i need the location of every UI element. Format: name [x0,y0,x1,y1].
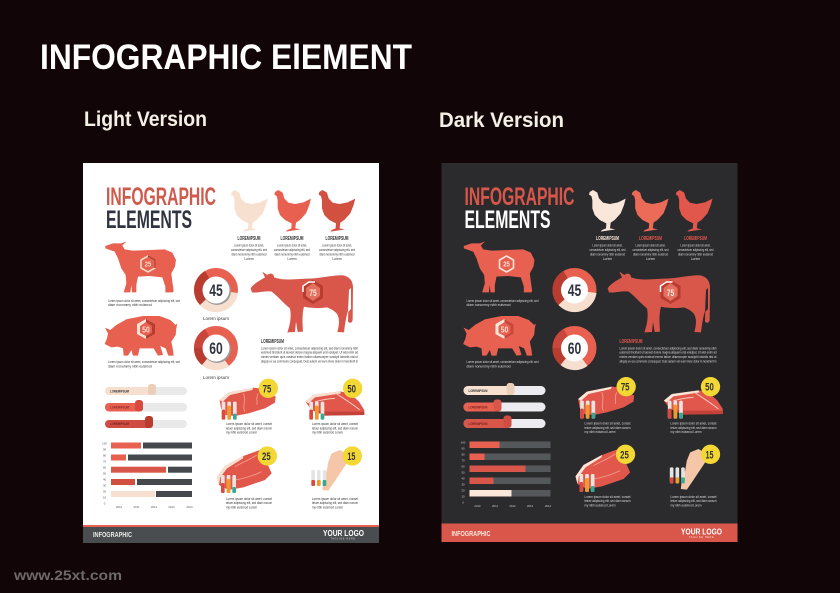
pig caption: Lorem ipsum dolor sit amet, consectetuer adipiscing elit, sed [466,360,539,364]
watermark: www.25xt.com [13,567,122,583]
slider 2 [105,400,187,412]
pig with badge: 50 [501,326,509,334]
bar chart: 80 [103,454,106,458]
hen caption 3 [678,236,714,261]
hen caption 1: Lorem ipsum dolor sit amet, [592,244,623,248]
pig caption: diam nonummy nibh euismod [108,364,152,368]
steak captions: tetuer adipiscing elit, sed diam nonum [226,426,272,430]
steak captions: my nibh euismod Lorem [584,430,616,434]
hen caption 1: Lorem ipsum dolor sit amet, [234,244,264,248]
steak captions: my nibh euismod Lorem [670,430,702,434]
hen caption 2: diam nonummy nibh euismod [274,252,310,256]
bar chart: 70 [461,458,465,462]
slider 1: LOREMIPSUM [110,390,129,394]
steak 50 [305,379,364,420]
cow caption: aliquip ex ea commodo consequat. Duis autem vel eum iriure dolor in hendrerit in [261,360,358,364]
cow caption: Lorem ipsum dolor sit amet, consectetuer adipiscing elit, sed diam nonummy nibh [261,346,358,350]
hen caption 2: consectetuer adipiscing elit, sed [274,248,310,252]
donut 60 [194,329,234,370]
poster title: ELEMENTS [106,206,192,234]
donut 45 [194,271,238,312]
slider 1 [464,383,546,395]
hen caption 2: consectetuer adipiscing elit, sed [632,248,669,252]
bar chart: 40 [461,476,465,480]
sheep caption: Lorem ipsum dolor sit amet, consectetuer adipiscing elit, sed [108,299,180,303]
bar chart: 0 [104,502,106,506]
heading: dark version: Dark Version [439,109,564,132]
steak captions: my nibh euismod Lorem [312,430,343,434]
bar chart: 90 [461,446,465,450]
steak 50: 50 [705,382,714,394]
main heading: INFOGRAPHIC ElEMENT [40,38,412,77]
sheep with badge: 25 [145,262,151,268]
bar chart: 2012 [151,505,158,509]
donut 60: 60 [209,339,223,358]
steak captions: Lorem ipsum dolor sit amet, conset [670,495,717,499]
bar chart: 30 [461,482,465,486]
steak 25: 25 [262,451,271,463]
hen caption 3: LOREMIPSUM [326,236,348,242]
cow caption [261,339,358,364]
steak 25 [575,445,635,492]
hen caption 1: LOREMIPSUM [238,236,260,242]
bar chart: 2010 [474,504,481,508]
steak captions: tetuer adipiscing elit, sed diam nonum [670,426,717,430]
cow with badge: 75 [309,288,317,298]
cow caption [620,339,717,364]
hen caption 2: Lorem ipsum dolor sit amet, [636,244,666,248]
pig with badge [105,316,177,356]
footer: TAGLINE HERE [330,538,356,540]
cow caption: euismod tincidunt ut laoreet dolore magna aliquam erat volutpat. Ut wisi enim ad [620,350,717,354]
sheep with badge [464,241,534,292]
pig caption: Lorem ipsum dolor sit amet, consectetuer adipiscing elit, sed [108,360,180,364]
steak captions: tetuer adipiscing elit, sed diam nonum [226,501,272,505]
poster title: INFOGRAPHIC [106,183,216,211]
hen caption 1: Lorem [244,257,254,261]
footer: YOUR LOGO [681,528,722,536]
hen: red [319,190,355,232]
hen caption 1: LOREMIPSUM [596,236,619,242]
slider 1 [105,384,187,395]
steak captions: tetuer adipiscing elit, sed diam nonum [584,426,631,430]
hen: coral [632,190,668,232]
steak captions: tetuer adipiscing elit, sed diam nonum [584,499,631,503]
slider 3 [464,416,546,428]
steak 50 [664,377,723,419]
pig caption [108,360,180,368]
steak captions: Lorem ipsum dolor sit amet, conset [584,422,631,426]
slider 3: LOREMIPSUM [468,422,488,426]
steak 50: 50 [347,383,356,395]
steak captions: Lorem ipsum dolor sit amet, conset [312,497,358,501]
bar chart: 20 [103,490,106,494]
cow caption: minim veniam quis nostrud exerci tation ullamcorper suscipit lobortis nisl ut [620,355,717,359]
steak 75: 75 [263,383,271,395]
bar chart: 2011 [133,505,140,509]
footer: YOUR LOGO [323,529,364,538]
hen caption 2: LOREMIPSUM [280,236,304,242]
steak 25: 25 [620,449,629,461]
bar chart: 2010 [116,505,123,509]
slider 2 [464,400,546,412]
bar chart [461,440,552,508]
steak 75: 75 [621,382,629,394]
cow caption: LOREMIPSUM [261,339,284,345]
bar chart: 60 [461,464,465,468]
hen: pale [589,190,626,232]
cow caption: euismod tincidunt ut laoreet dolore magna aliquam erat volutpat. Ut wisi enim ad [261,350,358,354]
hen: red [676,190,712,232]
steak captions: my nibh euismod Lorem [226,430,257,434]
hen caption 2 [274,236,310,261]
bar chart: 60 [103,466,106,470]
steak captions: Lorem ipsum dolor sit amet, conset [226,422,272,426]
hen caption 2: Lorem [646,257,655,261]
poultry leg 15 [670,445,720,490]
poster title: INFOGRAPHIC [464,183,574,211]
bar chart: 2014 [545,504,552,508]
hen caption 3: LOREMIPSUM [684,236,707,242]
bar chart: 40 [103,478,106,482]
footer: INFOGRAPHIC [452,529,491,538]
slider 2: LOREMIPSUM [468,406,488,410]
bar chart: 20 [461,488,465,492]
hen caption 1: consectetuer adipiscing elit, sed [590,248,626,252]
hen caption 1: consectetuer adipiscing elit, sed [231,248,267,252]
bar chart: 2014 [186,505,193,509]
hen caption 3: Lorem ipsum dolor sit amet, [680,244,711,248]
steak captions: my nibh euismod Lorem [584,503,616,507]
hen caption 2: diam nonummy nibh euismod [633,252,668,256]
sheep caption: Lorem ipsum dolor sit amet, consectetuer adipiscing elit, sed [466,299,539,303]
poultry leg 15 [311,446,362,491]
hen caption 1 [231,236,267,261]
bar chart [102,442,193,509]
sheep with badge [105,241,176,292]
steak captions [226,422,358,509]
steak captions [584,422,717,507]
hen caption 2 [632,236,669,261]
pig caption: diam nonummy nibh euismod [466,364,511,368]
bar chart: 100 [102,442,107,446]
footer [83,525,379,543]
sheep caption: diam nonummy nibh euismod [108,303,152,307]
hen caption 1: diam nonummy nibh euismod [232,252,267,256]
hen caption 1: Lorem [603,257,612,261]
bar chart: 30 [103,484,106,488]
pig with badge: 50 [142,326,150,334]
poster title [464,183,574,234]
sheep with badge: 25 [503,262,510,268]
poster title [106,183,216,234]
sheep caption [108,299,180,307]
donut 60: 60 [568,339,581,358]
hen caption 2: Lorem [287,257,297,261]
hen: coral [274,190,311,232]
slider 2: LOREMIPSUM [110,406,129,410]
donut 45: 45 [568,281,581,300]
cow caption: minim veniam quis nostrud exerci tation ullamcorper suscipit lobortis nisl ut [261,355,358,359]
pig caption [466,360,539,368]
donut label: Lorem ipsum [203,375,229,380]
donut 45: 45 [209,281,223,300]
cow with badge [251,272,353,332]
steak captions: Lorem ipsum dolor sit amet, conset [670,422,717,426]
cow caption: aliquip ex ea commodo consequat. Duis autem vel eum iriure dolor in hendrerit in [620,360,717,364]
hen caption 3: diam nonummy nibh euismod [678,252,713,256]
sheep caption: diam nonummy nibh euismod [466,303,511,307]
hen caption 3: consectetuer adipiscing elit, sed [319,248,355,252]
pig with badge [463,316,536,356]
heading: light version: Light Version [84,108,207,131]
bar chart: 90 [103,448,106,452]
bar chart: 50 [461,470,465,474]
cow caption: LOREMIPSUM [620,339,642,345]
poultry leg 15: 15 [705,449,713,461]
slider 3: LOREMIPSUM [110,422,129,426]
steak 75 [220,379,278,420]
footer: INFOGRAPHIC [93,530,132,539]
hen caption 3 [319,236,355,261]
footer [442,524,738,542]
steak captions: Lorem ipsum dolor sit amet, conset [312,422,358,426]
bar chart: 2013 [527,504,534,508]
donut 45 [552,271,596,312]
bar chart: 100 [461,440,466,444]
bar chart: 50 [103,472,106,476]
steak captions: Lorem ipsum dolor sit amet, conset [226,497,272,501]
panel: light poster [83,163,379,543]
slider 1: LOREMIPSUM [468,389,488,393]
footer: TAGLINE HERE [689,536,714,539]
panel: dark poster [442,163,738,542]
bar chart: 70 [103,460,106,464]
steak captions: tetuer adipiscing elit, sed diam nonum [670,499,717,503]
donut 60 [552,329,592,370]
steak captions: my nibh euismod Lorem [226,505,257,509]
hen caption 3: Lorem ipsum dolor sit amet, [322,244,352,248]
steak captions: my nibh euismod Lorem [312,505,343,509]
hen caption 2: LOREMIPSUM [639,236,662,242]
steak captions: tetuer adipiscing elit, sed diam nonum [312,426,358,430]
hen caption 2: Lorem ipsum dolor sit amet, [277,244,307,248]
hen caption 3: diam nonummy nibh euismod [320,252,355,256]
slider 3 [105,416,187,428]
steak captions: Lorem ipsum dolor sit amet, conset [584,495,631,499]
steak captions: tetuer adipiscing elit, sed diam nonum [312,501,358,505]
bar chart: 80 [461,452,465,456]
hen caption 1: diam nonummy nibh euismod [590,252,625,256]
poster title: ELEMENTS [464,206,550,234]
bar chart: 10 [103,496,106,500]
bar chart: 2011 [492,504,498,508]
donut label: Lorem ipsum [203,316,229,321]
bar chart: 2013 [168,505,175,509]
hen caption 3: Lorem [691,257,700,261]
poultry leg 15: 15 [347,451,355,463]
hen: pale [231,190,268,232]
sheep caption [466,299,539,307]
cow caption: Lorem ipsum dolor sit amet, consectetuer adipiscing elit, sed diam nonummy nibh [620,346,717,350]
bar chart: 2012 [509,504,516,508]
bar chart: 10 [461,494,465,498]
hen caption 3: Lorem [332,257,342,261]
steak 75 [578,377,636,419]
hen caption 3: consectetuer adipiscing elit, sed [678,248,714,252]
steak captions: my nibh euismod Lorem [670,503,702,507]
cow with badge [608,272,710,332]
cow with badge: 75 [667,288,674,298]
bar chart: 0 [462,500,464,504]
steak 25 [217,446,277,493]
hen caption 1 [590,236,626,261]
